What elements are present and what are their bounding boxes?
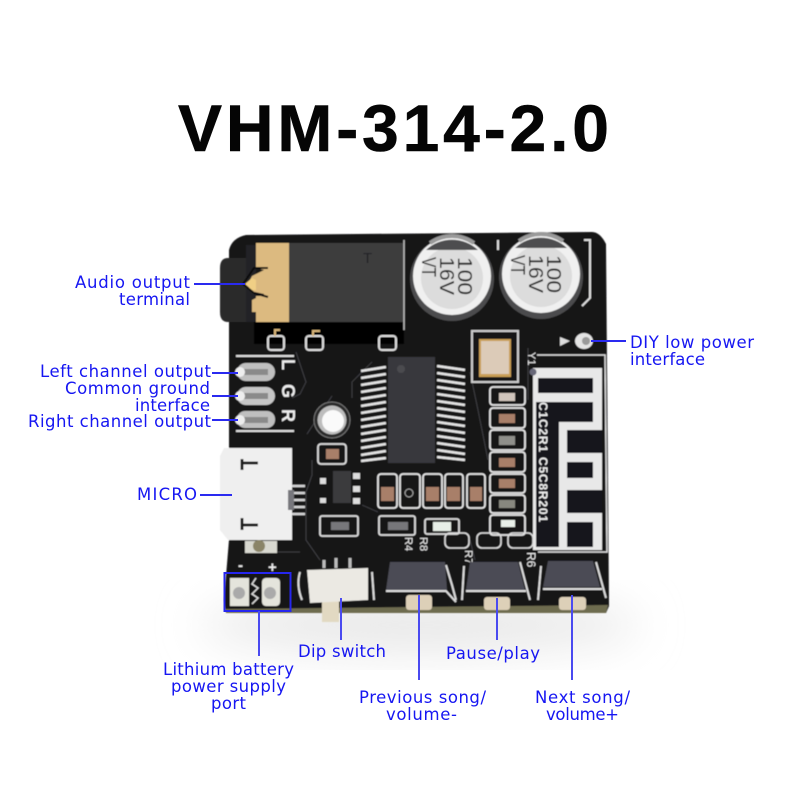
silkscreen around capacitors bbox=[498, 240, 590, 306]
label: previous song / volume- bbox=[359, 595, 486, 724]
capacitor 1 bbox=[410, 236, 494, 321]
label: audio output terminal bbox=[75, 273, 245, 309]
capacitor 2 bbox=[499, 234, 583, 319]
label: audio output terminal: Audio output bbox=[75, 273, 191, 292]
L G R header pads: L bbox=[278, 359, 298, 370]
label: next song / volume+: volume+ bbox=[546, 705, 619, 724]
L G R header pads: G bbox=[278, 384, 298, 398]
label: common ground interface: interface bbox=[135, 396, 210, 415]
main chip bbox=[361, 357, 465, 463]
pcb bottom edge bbox=[226, 605, 608, 613]
capacitor 1: 16V bbox=[435, 257, 457, 296]
label: micro: MICRO bbox=[137, 485, 197, 504]
label: dip switch bbox=[298, 598, 386, 661]
micro usb port: + bbox=[268, 559, 277, 576]
crystal bbox=[472, 331, 537, 382]
label: lithium battery power supply port: power supply bbox=[171, 677, 286, 696]
label: lithium battery power supply port bbox=[163, 611, 294, 713]
label: dip switch: Dip switch bbox=[298, 642, 386, 661]
label: left channel output: Left channel output bbox=[40, 362, 212, 381]
battery port highlight box bbox=[224, 573, 290, 611]
label: pause/play bbox=[446, 598, 540, 663]
small regulator area: R6 bbox=[524, 552, 538, 568]
label: pause/play: Pause/play bbox=[446, 644, 540, 663]
label: audio output terminal: terminal bbox=[119, 290, 190, 309]
circuit board photo bbox=[220, 232, 609, 622]
label: DIY low power interface: DIY low power bbox=[630, 333, 754, 352]
capacitor 2: 16V bbox=[524, 255, 546, 294]
label: right channel output: Right channel output bbox=[28, 412, 212, 431]
micro usb port bbox=[220, 448, 305, 576]
L G R header pads: R bbox=[278, 409, 298, 422]
small regulator area: R4 bbox=[402, 537, 414, 551]
label: micro bbox=[137, 485, 232, 504]
label: next song / volume+ bbox=[535, 595, 630, 724]
small regulator area bbox=[318, 444, 538, 568]
label: DIY low power interface: interface bbox=[630, 350, 705, 369]
label: lithium battery power supply port: port bbox=[211, 694, 247, 713]
button previous bbox=[386, 562, 456, 610]
label: previous song / volume-: Previous song/ bbox=[359, 688, 486, 707]
dip switch bbox=[298, 558, 374, 622]
component column bbox=[490, 387, 525, 535]
capacitor 2: VT bbox=[506, 255, 528, 275]
small regulator area: R8 bbox=[417, 537, 429, 551]
button pause bbox=[462, 562, 530, 610]
soft shadow under board bbox=[200, 597, 640, 653]
jack solder pads bbox=[268, 330, 396, 350]
small regulator area: R7 bbox=[462, 550, 474, 564]
label: DIY low power interface bbox=[591, 333, 754, 369]
button next bbox=[538, 561, 606, 610]
label: common ground interface: Common ground bbox=[65, 379, 210, 398]
silkscreen traces bbox=[245, 348, 528, 560]
crystal: Y1 bbox=[525, 352, 537, 365]
label: common ground interface bbox=[65, 379, 238, 415]
antenna bbox=[530, 355, 607, 552]
capacitor 1: VT bbox=[417, 257, 439, 277]
capacitor 1: 100 bbox=[453, 257, 475, 295]
audio jack bbox=[220, 240, 404, 344]
title: VHM-314-2.0 bbox=[178, 91, 609, 165]
audio jack: T bbox=[363, 250, 372, 267]
pcb base bbox=[224, 232, 609, 613]
component row bbox=[378, 474, 485, 508]
capacitor 2: 100 bbox=[542, 255, 564, 293]
L G R header pads bbox=[235, 356, 298, 431]
mounting hole bbox=[314, 402, 350, 438]
label: next song / volume+: Next song/ bbox=[535, 688, 630, 707]
low power interface pad bbox=[560, 333, 593, 349]
label: previous song / volume-: volume- bbox=[386, 705, 457, 724]
battery pads bbox=[230, 578, 280, 606]
antenna: C1C2R1 C5C8R201 bbox=[536, 402, 550, 522]
label: lithium battery power supply port: Lithium battery bbox=[163, 660, 294, 679]
micro usb port: - bbox=[238, 557, 243, 574]
